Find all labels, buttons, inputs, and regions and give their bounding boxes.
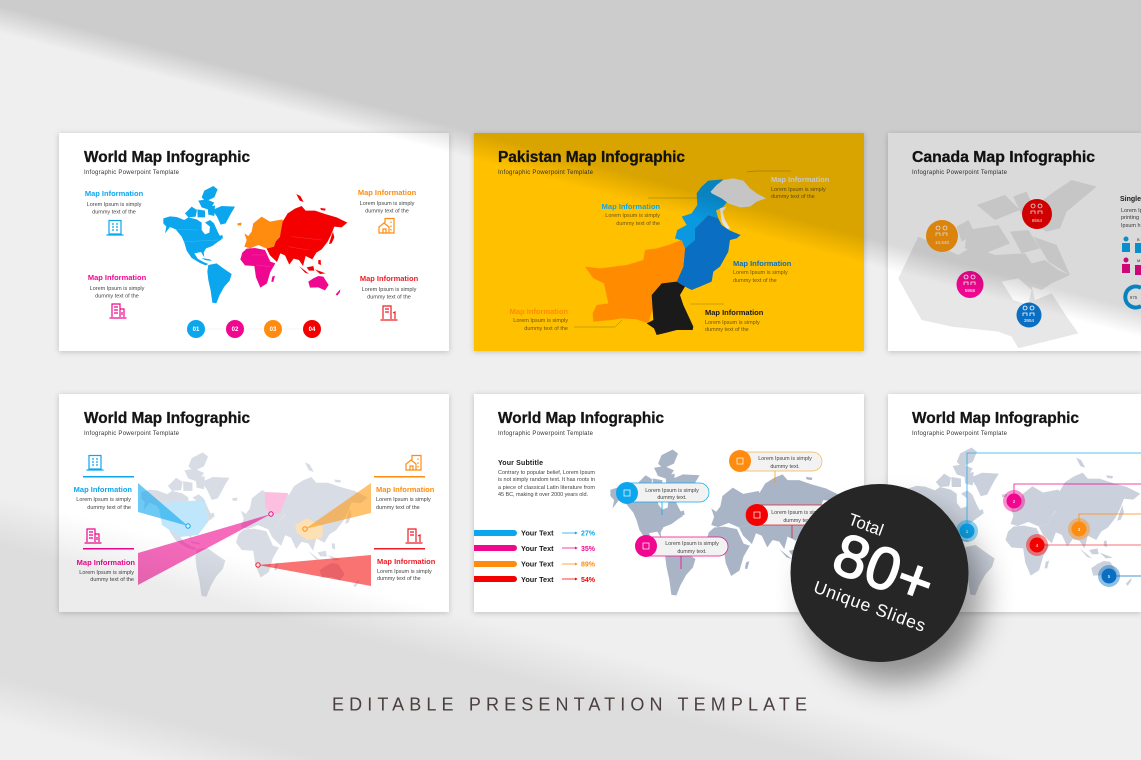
callout: orange region: Map Information (510, 307, 568, 316)
callout: pink map information: Lorem Ipsum is simply (90, 286, 145, 292)
badge text: Total (846, 510, 886, 540)
panel: world map with progress bars (474, 394, 864, 612)
progress row: 89%: Your Text (521, 560, 554, 568)
panel: Canada map slide (888, 133, 1141, 351)
marker 5 (1098, 565, 1141, 587)
progress row: 35%: Your Text (521, 544, 554, 553)
marker 1: 1 (966, 529, 969, 534)
callout: pink map information: Map Information (88, 273, 147, 282)
subheading: Infographic Powerpoint Template (912, 170, 1008, 176)
gray world map (141, 452, 368, 597)
wedge: pink (138, 512, 273, 585)
callout: black region: Lorem Ipsum is simply (705, 320, 760, 326)
callout: orange region: dummy text of the (524, 326, 568, 332)
side text: single: Ipsum h (1121, 223, 1141, 229)
subtitle and paragraph: Your Subtitle (498, 460, 543, 467)
progress row: 27% (474, 528, 596, 538)
Canada map (898, 180, 1097, 348)
numbered legend circles: 04 (309, 327, 316, 333)
progress row: 54%: 54% (581, 577, 596, 584)
map pill: pink (635, 535, 728, 569)
heading: Canada Map Infographic (912, 149, 1095, 166)
panel: world map with wedge callouts (59, 394, 449, 612)
callout: orange: Lorem Ipsum is simply (376, 497, 431, 503)
map pill: pink: Lorem Ipsum is simply (665, 541, 719, 547)
wedge: red (256, 555, 371, 586)
heading: Pakistan Map Infographic (498, 149, 685, 166)
subheading: Infographic Powerpoint Template (498, 431, 594, 437)
callout: red: Lorem Ipsum is simply (377, 569, 432, 575)
subtitle and paragraph (498, 460, 595, 498)
map pill: blue (616, 482, 709, 515)
subtitle and paragraph: 45 BC, making it over 2000 years old. (498, 492, 588, 498)
callout: red map information: Map Information (360, 274, 419, 283)
callout: blue map information: Lorem Ipsum is simply (87, 202, 142, 208)
map pill: red: dummy text. (783, 518, 813, 524)
callout: orange: Map Information (376, 485, 435, 494)
data bubble: orange: 10,540 (935, 240, 949, 245)
subtitle and paragraph: Contrary to popular belief, Lorem Ipsum (498, 470, 595, 476)
data bubble: red: 8554 (1032, 218, 1043, 223)
badge: 80+ unique slides (790, 484, 968, 662)
callout: black region: dummy text of the (705, 327, 749, 333)
callout: light gray region (771, 175, 830, 200)
map pill: orange: dummy text. (770, 464, 800, 470)
progress row: 27%: 27% (581, 530, 596, 538)
heading: World Map Infographic (84, 410, 250, 427)
side text: single (1120, 196, 1141, 229)
wedge: orange (303, 483, 371, 531)
callout: light gray region: dummy text of the (771, 194, 815, 200)
callout: light gray region: Lorem Ipsum is simply (771, 187, 826, 193)
subheading: Infographic Powerpoint Template (84, 170, 180, 176)
subtitle and paragraph: is not simply random text. It has roots in (498, 477, 595, 483)
callout: orange region: Lorem Ipsum is simply (513, 318, 568, 324)
map pill: orange: Lorem Ipsum is simply (758, 456, 812, 462)
map pill: orange (729, 450, 822, 483)
callout: red (374, 529, 436, 582)
callout: light gray region: Map Information (771, 175, 830, 184)
progress row: 35%: 35% (581, 546, 596, 553)
callout: light blue region: Map Information (602, 202, 660, 211)
marker 2 (1003, 484, 1141, 512)
marker 4: 4 (1036, 543, 1039, 548)
progress row: 27%: Your Text (521, 528, 554, 538)
gray world map (610, 449, 839, 596)
badge text: Unique Slides (811, 577, 929, 636)
callout: light blue region (602, 202, 660, 227)
callout: red: Map Information (377, 557, 436, 566)
callout: dark blue region: Lorem Ipsum is simply (733, 270, 788, 276)
callout: blue: Map Information (74, 485, 132, 494)
callout: blue map information: dummy text of the (92, 210, 136, 216)
map pill: red (746, 504, 838, 538)
callout: red map information: dummy text of the (367, 294, 411, 300)
highlighted regions (158, 492, 323, 540)
world map colored by region (163, 186, 347, 303)
Pakistan map by province (585, 178, 766, 335)
leader lines (574, 171, 791, 327)
badge text (811, 510, 943, 636)
progress row: 54%: Your Text (521, 575, 554, 584)
subheading: Infographic Powerpoint Template (84, 431, 180, 437)
callout: black region (705, 308, 764, 333)
heading: World Map Infographic (912, 410, 1079, 427)
wedge: blue (138, 483, 190, 528)
callout: blue: dummy text of the (87, 505, 131, 511)
callout: pink: Map Information (77, 558, 135, 567)
data bubble: pink: 5958 (965, 288, 976, 293)
progress row: 89% (474, 560, 596, 568)
side text: single: printing (1121, 215, 1139, 221)
callout: red map information: Lorem Ipsum is simply (362, 287, 417, 293)
marker 3 (1068, 514, 1141, 540)
progress row: 89%: 89% (581, 562, 596, 568)
side text: single: Single (1120, 196, 1141, 203)
numbered legend circles (187, 320, 321, 338)
callout: orange map information (358, 188, 417, 233)
data bubble: red (1022, 199, 1052, 229)
marker 4 (1026, 534, 1141, 556)
map pill: blue: dummy text. (657, 495, 687, 501)
progress row: 54% (474, 575, 596, 584)
panel: Pakistan map slide (474, 133, 864, 351)
subtitle and paragraph: a piece of classical Latin literature from (498, 485, 595, 491)
callout: orange region (510, 307, 568, 332)
callout: pink map information: dummy text of the (95, 294, 139, 300)
numbered legend circles: 02 (232, 327, 239, 333)
callout: orange map information: Map Information (358, 188, 417, 197)
footer caption: EDITABLE PRESENTATION TEMPLATE (332, 694, 807, 714)
marker 5: 5 (1108, 574, 1111, 579)
callout: orange map information: dummy text of the (365, 208, 409, 214)
subheading: Infographic Powerpoint Template (912, 431, 1008, 437)
panel: world map slide with colored continents (59, 133, 449, 351)
callout: light blue region: Lorem Ipsum is simply (605, 213, 660, 219)
person stats: B (1137, 237, 1140, 242)
data bubble: blue (1016, 302, 1042, 328)
callout: blue map information: Map Information (85, 189, 144, 198)
person stats (1122, 236, 1141, 275)
callout: pink: Lorem Ipsum is simply (79, 570, 134, 576)
callout: pink: dummy text of the (90, 577, 134, 583)
callout: dark blue region (733, 259, 792, 284)
data bubble: orange (926, 220, 958, 252)
callout: red: dummy text of the (377, 576, 421, 582)
callout: orange (374, 456, 435, 511)
donut gauge: 975 (1130, 295, 1138, 300)
callout: dark blue region: Map Information (733, 259, 792, 268)
callout: blue map information (85, 189, 144, 235)
person stats: M (1137, 258, 1140, 263)
callout: black region: Map Information (705, 308, 764, 317)
marker 3: 3 (1078, 527, 1081, 532)
numbered legend circles: 01 (193, 327, 200, 333)
marker 1 (956, 453, 1141, 542)
callout: orange: dummy text of the (376, 505, 420, 511)
callout: dark blue region: dummy text of the (733, 278, 777, 284)
callout: blue: Lorem Ipsum is simply (76, 497, 131, 503)
subheading: Infographic Powerpoint Template (498, 170, 594, 176)
callout: pink map information (88, 273, 147, 318)
map pill: blue: Lorem Ipsum is simply (645, 488, 699, 494)
data bubble: blue: 3954 (1024, 318, 1035, 323)
map pill: red: Lorem Ipsum is simply (771, 510, 825, 516)
marker 2: 2 (1013, 499, 1016, 504)
callout: red map information (360, 274, 419, 320)
callout: pink (77, 529, 135, 583)
callout: blue (74, 456, 134, 511)
gray world map (908, 448, 1140, 595)
progress row: 35% (474, 544, 596, 553)
callout: orange map information: Lorem Ipsum is simply (360, 201, 415, 207)
map pill: pink: dummy text. (677, 549, 707, 555)
badge text: 80+ (825, 520, 943, 618)
panel: world map with numbered markers (888, 394, 1141, 612)
heading: World Map Infographic (84, 149, 250, 166)
data bubble: pink (956, 271, 984, 298)
numbered legend circles: 03 (270, 327, 277, 333)
heading: World Map Infographic (498, 410, 664, 427)
callout: light blue region: dummy text of the (616, 221, 660, 227)
donut gauge (1125, 286, 1141, 307)
